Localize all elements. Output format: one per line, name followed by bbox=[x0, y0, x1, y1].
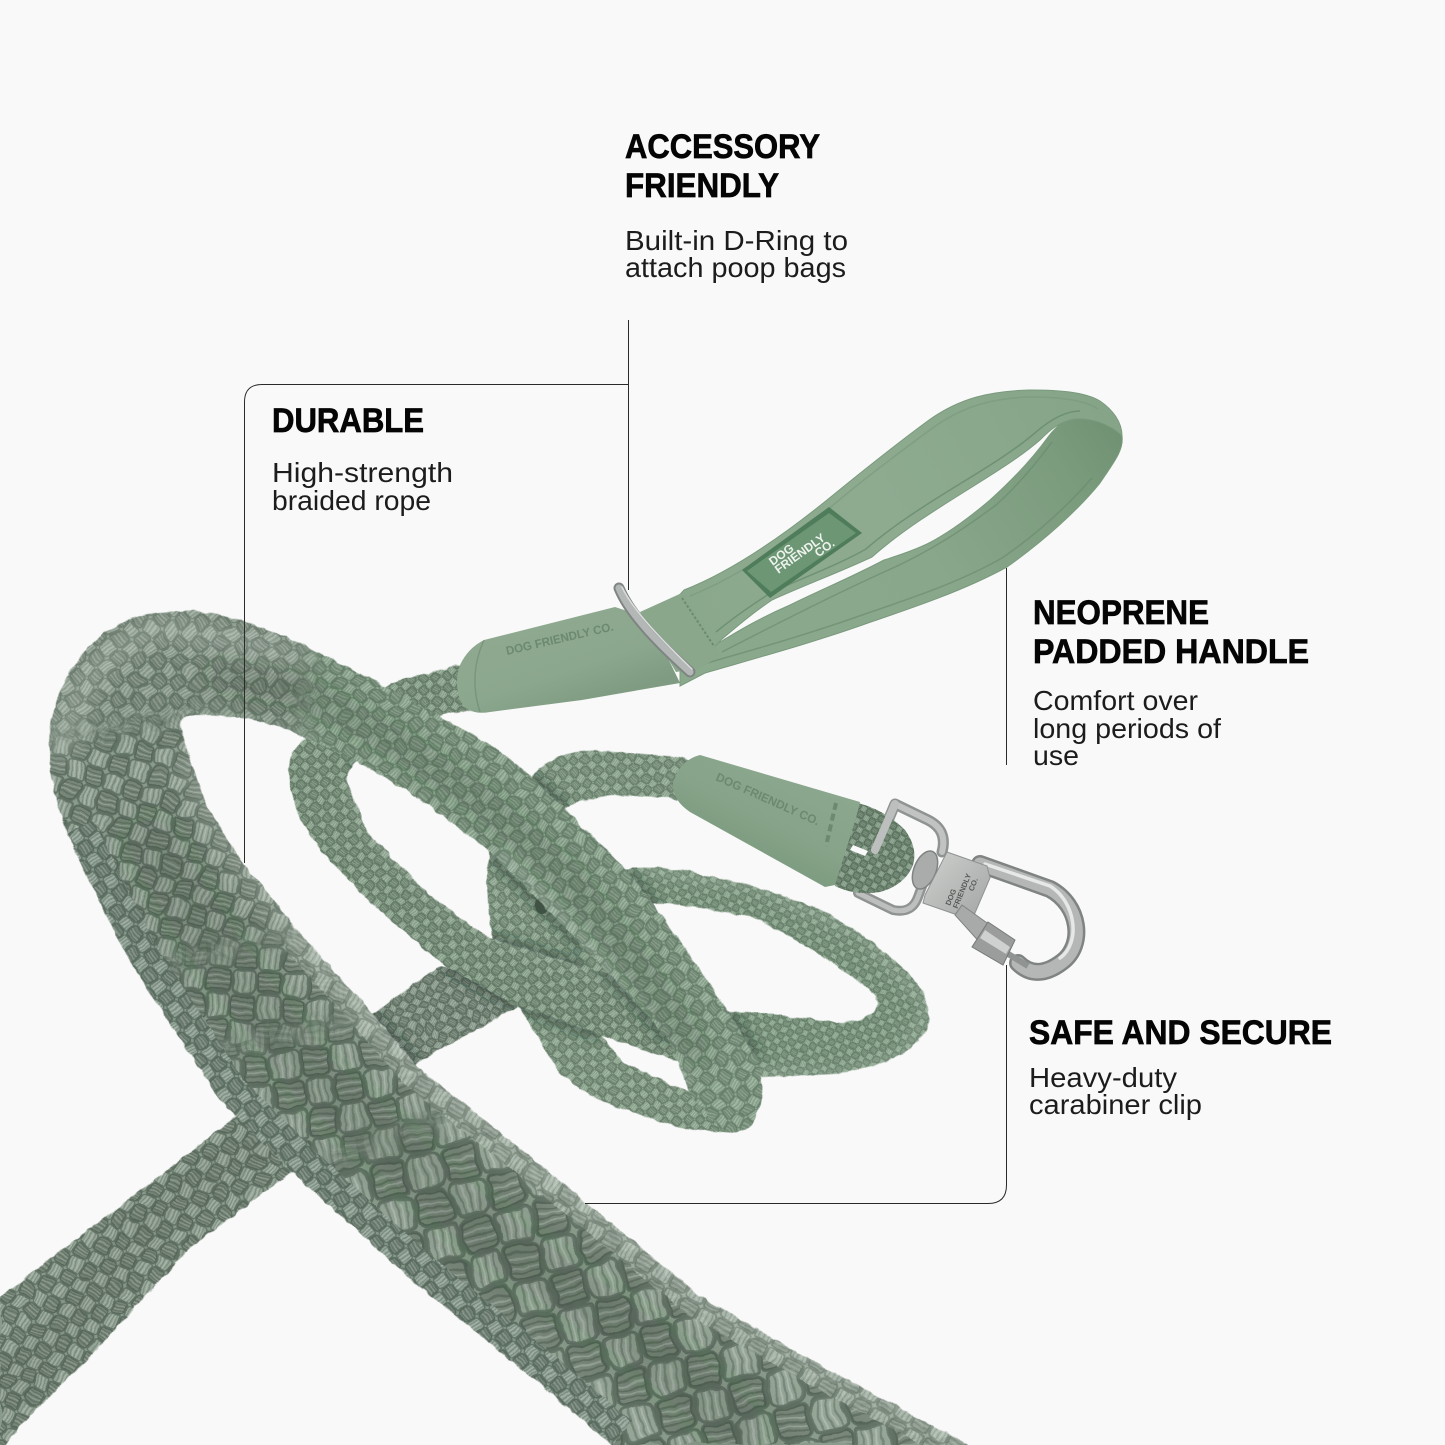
top band edge piping bbox=[716, 411, 1080, 632]
text block: safe and secure: Heavy-duty bbox=[1029, 1062, 1177, 1093]
text block: neoprene padded handle: long periods of bbox=[1033, 713, 1221, 744]
rope: upper-left loop bbox=[288, 664, 678, 1062]
brand patch: DOG bbox=[766, 541, 796, 568]
text block: durable bbox=[272, 402, 453, 516]
rope: inner loop behind the diagonal bbox=[486, 750, 758, 1133]
callout line: neoprene handle bbox=[1006, 568, 1008, 765]
brand patch bbox=[742, 507, 862, 598]
text block: safe and secure: SAFE AND SECURE bbox=[1029, 1014, 1332, 1052]
text block: neoprene padded handle bbox=[1033, 594, 1309, 771]
text block: neoprene padded handle: PADDED HANDLE bbox=[1033, 633, 1309, 671]
clip engraved text: FRIENDLY bbox=[951, 872, 973, 910]
neoprene handle bbox=[640, 390, 1122, 686]
cone embossed text: DOG FRIENDLY CO. bbox=[505, 620, 615, 658]
handle stitching tab bbox=[640, 592, 722, 672]
gap in the weave bbox=[535, 896, 549, 914]
outer edge fine strands bbox=[67, 833, 612, 1445]
brand patch: CO. bbox=[812, 536, 837, 560]
upper edge piping bbox=[690, 397, 1098, 596]
plate bbox=[923, 852, 990, 919]
handle back band bbox=[680, 412, 1122, 686]
carabiner clip bbox=[923, 852, 1076, 972]
text block: durable: High-strength bbox=[272, 457, 453, 488]
gate bbox=[955, 905, 990, 945]
rope: far right ring bbox=[624, 866, 930, 1078]
rope: lower-left strand running off the page bbox=[0, 966, 518, 1445]
hole inside the rope loop bbox=[850, 845, 868, 856]
text block: durable: braided rope bbox=[272, 485, 431, 516]
locking barrel bbox=[972, 922, 1015, 965]
callout line: accessory friendly and durable bracket bbox=[244, 320, 628, 863]
text block: durable: DURABLE bbox=[272, 402, 424, 440]
text block: safe and secure bbox=[1029, 1014, 1332, 1120]
thin gate bbox=[1005, 952, 1028, 966]
cone embossed text: DOG FRIENDLY CO. bbox=[714, 770, 822, 828]
text block: accessory friendly: attach poop bags bbox=[625, 252, 846, 283]
text block: accessory friendly bbox=[625, 128, 848, 283]
callout line: safe and secure bracket bbox=[585, 965, 1006, 1204]
rope: large foreground braid with top arc and diagonal bbox=[48, 610, 968, 1445]
text block: neoprene padded handle: NEOPRENE bbox=[1033, 594, 1209, 632]
text block: neoprene padded handle: Comfort over bbox=[1033, 685, 1198, 716]
text block: accessory friendly: Built-in D-Ring to bbox=[625, 225, 848, 256]
text block: neoprene padded handle: use bbox=[1033, 740, 1079, 771]
cone rope collar bbox=[475, 640, 484, 712]
snap-end rope cone bbox=[673, 755, 860, 887]
text block: accessory friendly: ACCESSORY bbox=[625, 128, 820, 166]
text block: safe and secure: carabiner clip bbox=[1029, 1089, 1202, 1120]
rope stub looped through the swivel ring bbox=[830, 803, 914, 893]
cone logo marks bbox=[826, 803, 836, 846]
D-ring bbox=[619, 587, 692, 672]
barrel highlight bbox=[980, 930, 1010, 954]
clip engraved text: CO. bbox=[967, 877, 980, 892]
swivel upright bar over rope bbox=[875, 804, 895, 850]
swivel barrel bbox=[907, 847, 943, 893]
handle top band bbox=[648, 390, 1122, 662]
text block: accessory friendly: FRIENDLY bbox=[625, 167, 779, 205]
brand patch: FRIENDLY bbox=[772, 531, 828, 576]
inner edge lighter tiles bbox=[300, 933, 969, 1445]
back band seams bbox=[700, 442, 1092, 665]
top rope cone bbox=[457, 607, 680, 713]
clip engraved text: DOG bbox=[944, 887, 958, 907]
stitching bbox=[682, 598, 714, 646]
swivel link bbox=[858, 804, 943, 911]
hook bbox=[980, 864, 1076, 972]
